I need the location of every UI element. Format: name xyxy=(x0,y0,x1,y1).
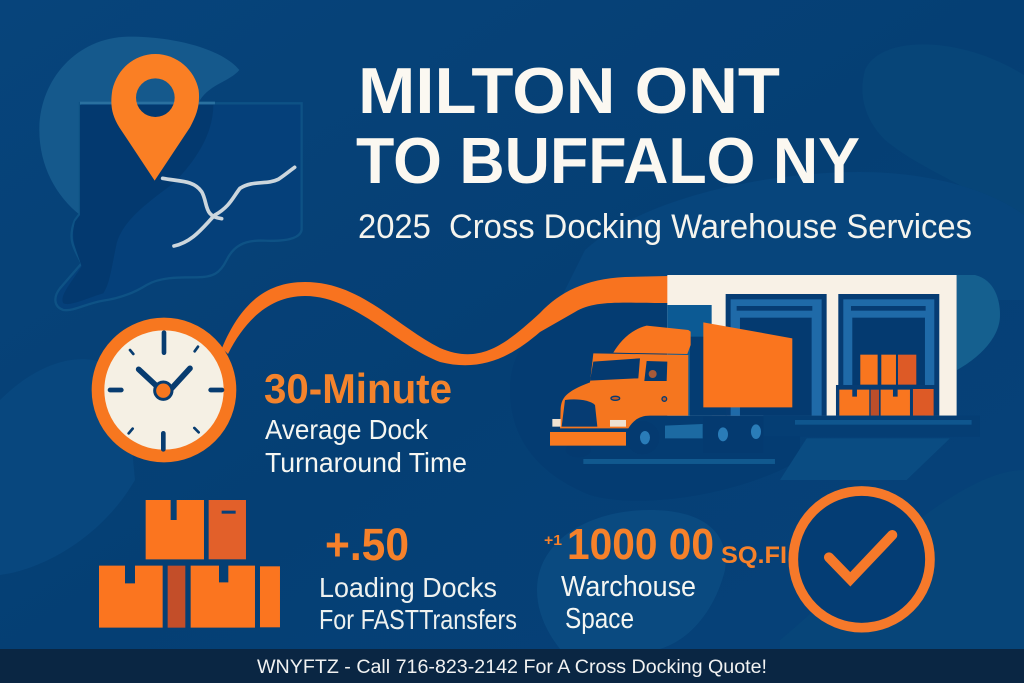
clock: hands xyxy=(139,368,190,388)
map: dark shaded area xyxy=(62,105,213,304)
title xyxy=(356,54,860,197)
truck: door details xyxy=(611,396,667,401)
stat label: warehouse space xyxy=(561,571,696,635)
subtitle: 2025 Cross Docking Warehouse Services xyxy=(358,208,972,246)
boxes icon xyxy=(99,500,280,628)
stat label: loading docks: For FASTTransfers xyxy=(319,604,517,635)
stat label: warehouse space: Warchouse xyxy=(561,571,696,603)
stat value: 100000 sq ft: SQ.FI xyxy=(721,542,787,569)
ground line xyxy=(583,459,775,464)
clock: tick marks xyxy=(110,333,222,449)
loading bay floor highlight xyxy=(780,438,950,480)
stat label: loading docks xyxy=(319,572,517,635)
clock icon xyxy=(98,324,230,456)
title: MILTON ONT xyxy=(358,54,780,127)
footer text: WNYFTZ - Call 716-823-2142 For A Cross Docking Quote! xyxy=(257,657,767,678)
map: region outline xyxy=(55,103,302,310)
clock: hub xyxy=(155,382,172,399)
warehouse: building xyxy=(667,275,957,416)
stat value: +.50: +.50 xyxy=(325,519,409,570)
stat label: dock turnaround: Turnaround Time xyxy=(265,447,467,478)
stat value: 100000 sq ft xyxy=(544,520,787,569)
truck xyxy=(550,322,792,457)
check mark icon xyxy=(793,491,930,628)
stat label: warehouse space: Space xyxy=(565,603,634,635)
footer bar xyxy=(0,649,1024,683)
warehouse and truck xyxy=(550,275,980,480)
truck: sleeper xyxy=(613,326,691,354)
title: TO BUFFALO NY xyxy=(356,124,860,197)
map with location pin xyxy=(39,37,302,310)
icon: map pin xyxy=(111,54,199,181)
map: road lines xyxy=(163,167,295,246)
stat value: 30-Minute: 30-Minute xyxy=(264,365,452,412)
truck: bumper shadow xyxy=(566,443,591,457)
stat value: 100000 sq ft: +1 xyxy=(544,532,562,549)
truck: front wheel xyxy=(626,421,659,454)
map: lighter blob xyxy=(39,37,239,215)
truck: bumper xyxy=(550,432,626,446)
truck: grille xyxy=(562,399,597,427)
truck: chassis and rear wheels xyxy=(665,417,763,453)
truck: windshield xyxy=(590,358,640,381)
stat: dock turnaround xyxy=(264,365,467,478)
truck: headlights xyxy=(552,419,626,427)
map: highlight edge xyxy=(80,102,215,104)
dock apron xyxy=(763,416,980,437)
truck: cargo trailer xyxy=(703,322,792,407)
stat: loading docks xyxy=(319,519,517,635)
stacked cargo boxes xyxy=(836,355,937,416)
dock platform line xyxy=(795,420,972,425)
warehouse: door 2 xyxy=(838,294,939,416)
warehouse: door 1 xyxy=(726,294,827,416)
route line xyxy=(222,276,668,365)
stat label: dock turnaround xyxy=(265,414,467,478)
truck: side window xyxy=(644,361,667,381)
truck: cab xyxy=(560,353,688,428)
stat label: loading docks: Loading Docks xyxy=(319,572,497,603)
stat label: dock turnaround: Average Dock xyxy=(265,414,429,445)
stat value: 100000 sq ft: 1000 00 xyxy=(567,520,714,569)
stat: warehouse space xyxy=(544,520,787,635)
